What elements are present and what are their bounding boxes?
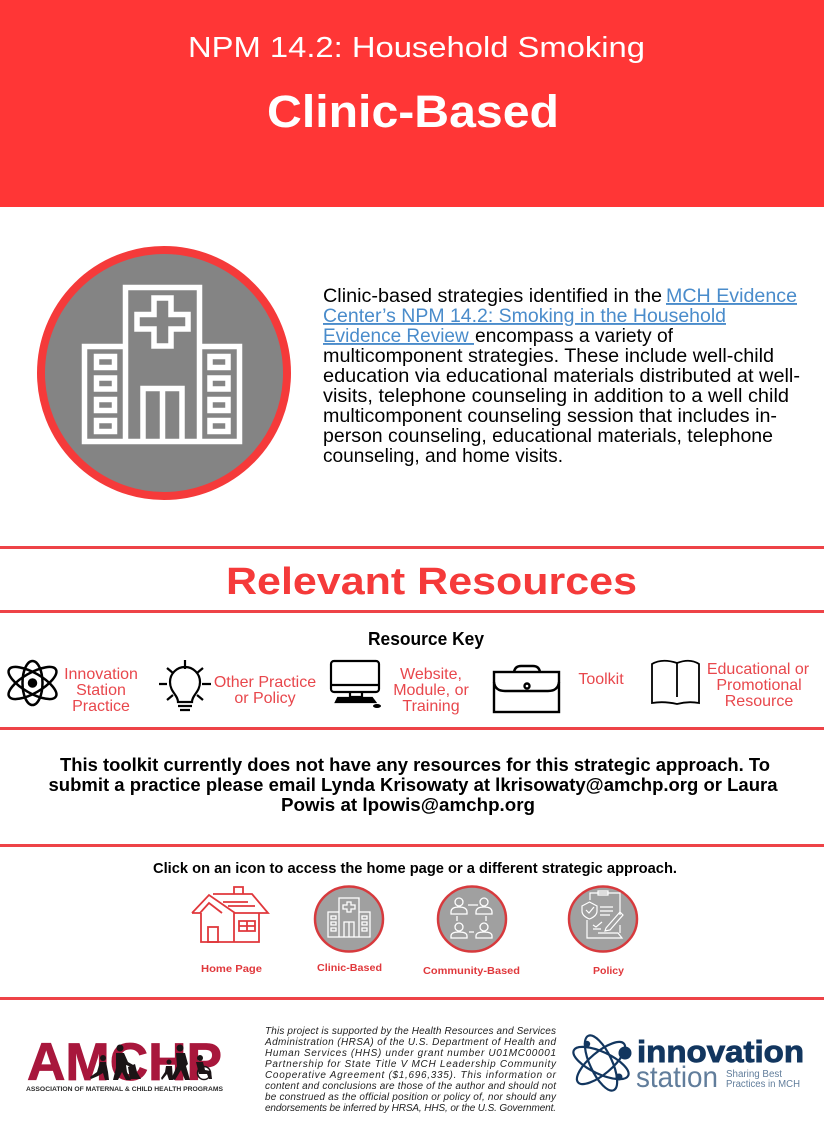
logo: innovation station — [569, 1031, 804, 1095]
text block: clinic-based description: Evidence Review — [323, 326, 474, 347]
label: Educational or Promotional Resource: Promotional — [716, 677, 802, 694]
heading: Relevant Resources: Relevant Resources — [226, 561, 637, 603]
text block: clinic-based description: visits, telephone counseling in addition to a well child — [323, 386, 789, 407]
header banner — [0, 0, 824, 207]
icon: light bulb — [159, 660, 211, 710]
label: Innovation Station Practice: Innovation — [64, 666, 138, 683]
label: Other Practice or Policy: Other Practice — [214, 674, 316, 691]
icon: atom — [4, 661, 61, 705]
label: Clinic-Based: Clinic-Based — [317, 963, 382, 974]
silhouettes of families — [90, 1044, 212, 1080]
funding disclaimer: Cooperative Agreement ($1,696,335). This information or — [265, 1070, 557, 1081]
funding disclaimer — [264, 1026, 557, 1114]
icon: computer — [331, 661, 381, 708]
text block: clinic-based description: encompass a variety of — [475, 326, 674, 347]
funding disclaimer: content and conclusions are those of the author and should not — [265, 1081, 557, 1092]
text block: clinic-based description: multicomponent strategies. These include well-child — [323, 346, 774, 367]
logo: innovation station: Sharing Best — [726, 1069, 782, 1080]
label: Toolkit: Toolkit — [578, 671, 624, 688]
label: Home Page: Home Page — [201, 964, 262, 975]
icon: home page — [192, 887, 268, 942]
label: Community-Based: Community-Based — [423, 966, 520, 977]
icon: policy nav — [569, 886, 637, 952]
text block: clinic-based description: person counseling, educational materials, telephone — [323, 426, 773, 447]
funding disclaimer: Partnership for State Title V MCH Leadership Community — [265, 1059, 557, 1070]
label: Other Practice or Policy: or Policy — [234, 690, 296, 707]
icon: clinic-based nav — [315, 886, 383, 952]
text block: clinic-based description — [323, 286, 800, 467]
label: Innovation Station Practice — [64, 666, 138, 715]
text block: clinic-based description: Clinic-based strategies identified in the — [323, 286, 662, 307]
title: NPM 14.2: NPM 14.2: Household Smoking — [188, 32, 645, 64]
logo: AMCHP: AMCHP — [27, 1033, 222, 1092]
heading: Clinic-Based: Clinic-Based — [267, 86, 559, 137]
funding disclaimer: endorsements be inferred by HRSA, HHS, or the U.S. Government. — [265, 1103, 556, 1114]
logo: innovation station: station — [636, 1061, 718, 1094]
logo tagline: ASSOCIATION OF MATERNAL & CHILD HEALTH PROGRAMS — [26, 1086, 224, 1093]
funding disclaimer: This project is supported by the Health Resources and Services — [265, 1026, 556, 1037]
icon: hospital in circle — [41, 250, 287, 496]
label: Website, Module, or Training: Website, — [400, 666, 462, 683]
label: Policy: Policy — [593, 966, 624, 977]
heading: Resource Key: Resource Key — [368, 629, 484, 649]
text block: clinic-based description: counseling, and home visits. — [323, 446, 563, 467]
text block: clinic-based description: multicomponent counseling session that includes in- — [323, 406, 777, 427]
icon: community-based nav — [438, 886, 506, 952]
label: Innovation Station Practice: Station — [76, 682, 126, 699]
label: Website, Module, or Training — [393, 666, 469, 715]
label: Educational or Promotional Resource — [707, 661, 810, 710]
label: Educational or Promotional Resource: Educational or — [707, 661, 810, 678]
label: Website, Module, or Training: Module, or — [393, 682, 469, 699]
text block: clinic-based description: education via educational materials distributed at well- — [323, 366, 800, 387]
funding disclaimer: Administration (HRSA) of the U.S. Department of Health and — [264, 1037, 556, 1048]
logo: innovation station: innovation — [637, 1034, 804, 1069]
text block: clinic-based description: Center’s NPM 14.2: Smoking in the Household — [323, 306, 726, 327]
notice text: Powis at lpowis@amchp.org — [281, 795, 535, 815]
funding disclaimer: Human Services (HHS) under grant number U01MC00001 — [265, 1048, 556, 1059]
navigation instruction: Click on an icon to access the home page or a different strategic approach. — [153, 860, 677, 877]
label: Website, Module, or Training: Training — [402, 698, 460, 715]
funding disclaimer: be construed as the official position or policy of, nor should any — [265, 1092, 557, 1103]
notice text: This toolkit currently does not have any resources for this strategic approach. To — [60, 755, 770, 775]
icon: briefcase — [494, 666, 559, 712]
notice text — [48, 755, 779, 815]
label: Educational or Promotional Resource: Resource — [725, 693, 793, 710]
label: Other Practice or Policy — [214, 674, 316, 707]
logo: innovation station: Practices in MCH — [726, 1079, 800, 1090]
label: Innovation Station Practice: Practice — [72, 698, 130, 715]
text block: clinic-based description: MCH Evidence — [666, 286, 797, 307]
icon: open book — [652, 661, 699, 704]
notice text: submit a practice please email Lynda Krisowaty at lkrisowaty@amchp.org or Laura — [48, 775, 779, 795]
